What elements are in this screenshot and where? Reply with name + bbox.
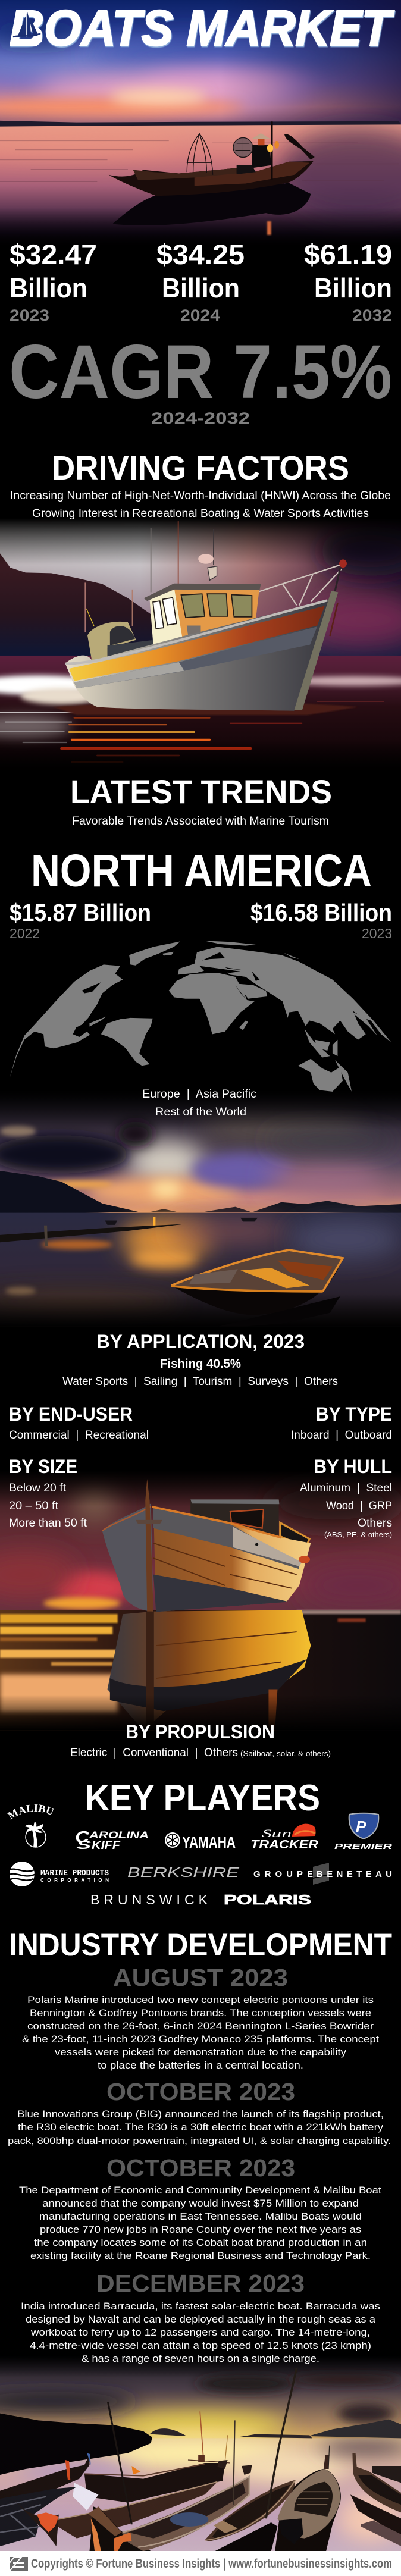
segment: by type: BY TYPE bbox=[316, 1403, 392, 1425]
icon: sailboat logo in B bbox=[11, 11, 42, 46]
development: December 2023: designed by Navalt and can be deployed actually in the rough seas as a bbox=[26, 2314, 376, 2325]
logo: Carolina Skiff: C bbox=[75, 1828, 90, 1846]
market value 2032: 2032 bbox=[352, 306, 392, 324]
development: December 2023: India introduced Barracuda, its fastest solar-electric boat. Barracuda was bbox=[21, 2301, 380, 2312]
development: October 2023 Blue Innovations: OCTOBER 2023 bbox=[106, 2078, 295, 2105]
development: October 2023 Blue Innovations: pack, 800bhp dual-motor powertrain, integrated UI, & solar charging capability. bbox=[8, 2135, 391, 2146]
market value 2024: 2024 bbox=[180, 306, 220, 324]
development: October 2023 Blue Innovations: Blue Innovations Group (BIG) announced the launch of its flagship product, bbox=[17, 2108, 384, 2120]
development: October 2023 Blue Innovations bbox=[8, 2078, 391, 2146]
development: August 2023: Polaris Marine introduced two new concept electric pontoons under its bbox=[27, 1994, 374, 2005]
heading: latest trends: Favorable Trends Associated with Marine Tourism bbox=[72, 815, 329, 828]
development: August 2023: vessels were picked for demonstration due to the capability bbox=[55, 2047, 347, 2058]
market value 2024 bbox=[156, 239, 245, 324]
market value 2023: 2023 bbox=[10, 306, 49, 324]
market value 2032: $61.19 bbox=[304, 239, 392, 270]
footer bbox=[0, 2551, 401, 2576]
heading: driving factors: Growing Interest in Recreational Boating & Water Sports Activities bbox=[32, 507, 369, 520]
logo: Marine Products: MARINE PRODUCTS bbox=[40, 1869, 109, 1878]
segment: by propulsion: Electric | Conventional | Others bbox=[70, 1747, 238, 1759]
segment: by hull: BY HULL bbox=[314, 1456, 392, 1477]
segment: by hull: Others bbox=[358, 1517, 392, 1530]
development: August 2023: & the 23-foot, 11-inch 2023 Godfrey Monaco 235 platforms. The concept bbox=[22, 2033, 379, 2045]
logo: Premier bbox=[334, 1813, 393, 1851]
north america value 2022 bbox=[10, 899, 151, 941]
segment: by propulsion: BY PROPULSION bbox=[126, 1721, 275, 1743]
segment: by type: Inboard | Outboard bbox=[291, 1429, 392, 1441]
panel: lake sunset photo bbox=[0, 1092, 401, 1329]
segment: by hull: (ABS, PE, & others) bbox=[324, 1530, 392, 1539]
CAGR callout: 2024-2032 bbox=[151, 409, 250, 427]
logo: Sun Tracker bbox=[250, 1824, 319, 1851]
regions list: Rest of the World bbox=[155, 1106, 246, 1118]
north america value 2022: 2022 bbox=[10, 926, 40, 941]
development: December 2023: workboat to ferry up to 12 passengers and cargo. The 14-metre-long, bbox=[30, 2327, 370, 2338]
segment: by end-user: BY END-USER bbox=[9, 1403, 133, 1425]
development: October 2023 Malibu: existing facility at the Roane Regional Business and Technology Park. bbox=[30, 2250, 371, 2261]
regions list: Europe | Asia Pacific bbox=[142, 1088, 256, 1101]
rowing boat bbox=[171, 1249, 344, 1315]
segment: by hull bbox=[300, 1456, 392, 1539]
segment: by end-user bbox=[9, 1403, 149, 1441]
development: August 2023: to place the batteries in a central location. bbox=[98, 2060, 303, 2071]
distant shoreline bbox=[0, 121, 401, 127]
logo: Polaris: POLARIS bbox=[224, 1892, 311, 1907]
heading: driving factors: DRIVING FACTORS bbox=[52, 449, 349, 487]
development: October 2023 Malibu: manufacturing operations in East Tennessee. Malibu Boats would bbox=[39, 2211, 362, 2222]
logo: Berkshire: BERKSHIRE bbox=[127, 1864, 240, 1880]
heading: driving factors: Increasing Number of High-Net-Worth-Individual (HNWI) Across the Globe bbox=[10, 490, 391, 502]
logo: Carolina Skiff: S bbox=[76, 1839, 92, 1852]
segment: by end-user: Commercial | Recreational bbox=[9, 1429, 149, 1441]
logo: Premier: PREMIER bbox=[334, 1842, 393, 1851]
market value 2032 bbox=[304, 239, 392, 324]
segment: by size: 20 – 50 ft bbox=[9, 1500, 59, 1512]
market value 2032: Billion bbox=[314, 272, 392, 303]
market value 2023 bbox=[10, 239, 97, 324]
logo: Carolina Skiff bbox=[75, 1828, 149, 1852]
heading: latest trends bbox=[70, 773, 332, 828]
development: August 2023: constructed on the 26-foot, 6-inch 2024 Bennington L-Series Bowrider bbox=[27, 2020, 374, 2032]
title: BOATS MARKET bbox=[10, 0, 394, 56]
boat reflection bbox=[112, 183, 311, 225]
logo: Carolina Skiff: KIFF bbox=[92, 1839, 121, 1852]
logo: Sun Tracker: Sun bbox=[262, 1828, 292, 1840]
world map globe bbox=[10, 941, 391, 1092]
heading: by application bbox=[62, 1331, 338, 1388]
logo: Yamaha: YAMAHA bbox=[182, 1833, 236, 1851]
regions list bbox=[142, 1088, 256, 1118]
boat reflection bbox=[108, 1610, 311, 1732]
boats group bbox=[0, 2368, 401, 2551]
segment: by propulsion: (Sailboat, solar, & others) bbox=[240, 1749, 331, 1758]
icon: Fortune Business Insights logo bbox=[10, 2557, 28, 2571]
development: October 2023 Malibu: the company locates some of its Cobalt boat brand production in an bbox=[34, 2237, 367, 2248]
market value 2024: $34.25 bbox=[156, 239, 245, 270]
development: December 2023: & has a range of seven hours on a single charge. bbox=[82, 2353, 319, 2364]
market value 2024: Billion bbox=[162, 272, 240, 303]
segment: by size: Below 20 ft bbox=[9, 1482, 67, 1494]
development: August 2023: Bennington & Godfrey Pontoons brands. The conception vessels were bbox=[30, 2007, 371, 2019]
logo: Groupe Beneteau bbox=[253, 1863, 392, 1885]
development: October 2023 Malibu: OCTOBER 2023 bbox=[106, 2154, 295, 2182]
segment: by hull: Aluminum | Steel bbox=[300, 1482, 392, 1494]
north america value 2023 bbox=[250, 899, 392, 941]
panel: hero fisherman photo bbox=[0, 0, 401, 246]
development: October 2023 Malibu: announced that the company would invest $75 Million to expand bbox=[42, 2198, 359, 2209]
development: October 2023 Malibu: The Department of Economic and Community Development & Malibu Boat bbox=[19, 2185, 381, 2196]
north america value 2022: $15.87 Billion bbox=[10, 899, 151, 926]
segment: by propulsion bbox=[70, 1721, 331, 1759]
lantern reflection bbox=[267, 221, 271, 235]
logo: Groupe Beneteau: GROUPE bbox=[253, 1869, 313, 1879]
north america value 2023: 2023 bbox=[362, 926, 392, 941]
wooden boat bbox=[102, 1479, 311, 1612]
fishing boat bbox=[109, 121, 315, 196]
development: August 2023 bbox=[22, 1964, 379, 2071]
logo: Marine Products: CORPORATION bbox=[40, 1878, 109, 1883]
segment: by hull: Wood | GRP bbox=[326, 1500, 392, 1512]
segment: by size bbox=[9, 1456, 87, 1530]
development: October 2023 Blue Innovations: the R30 electric boat. The R30 is a 30ft electric boat with a 221kWh battery bbox=[18, 2121, 384, 2133]
market value 2023: $32.47 bbox=[10, 239, 97, 270]
logo: Premier: P bbox=[356, 1817, 366, 1835]
logo: Sun Tracker: TRACKER bbox=[250, 1838, 319, 1851]
development: December 2023: 4.4-metre-wide vessel can attain a top speed of 12.5 knots (23 kmph) bbox=[30, 2340, 371, 2351]
logo: Carolina Skiff: AROLINA bbox=[89, 1829, 149, 1841]
heading: driving factors bbox=[10, 449, 391, 520]
logo: Brunswick: BRUNSWICK bbox=[90, 1892, 208, 1907]
logo: Marine Products bbox=[8, 1862, 109, 1886]
segment: by size: More than 50 ft bbox=[9, 1517, 87, 1530]
logo: Malibu bbox=[7, 1804, 55, 1848]
heading: key players: KEY PLAYERS bbox=[85, 1778, 320, 1819]
segment: by size: BY SIZE bbox=[9, 1456, 77, 1477]
market value 2023: Billion bbox=[10, 272, 87, 303]
segment: by type bbox=[291, 1403, 392, 1441]
heading: by application: Water Sports | Sailing | Tourism | Surveys | Others bbox=[62, 1375, 338, 1388]
panel: fishing trawler photo bbox=[0, 519, 401, 771]
heading: by application: BY APPLICATION, 2023 bbox=[96, 1331, 305, 1352]
development: October 2023 Malibu: produce 770 new jobs in Roane County over the next five years as bbox=[40, 2224, 361, 2235]
development: August 2023: AUGUST 2023 bbox=[113, 1964, 288, 1991]
trawler boat bbox=[65, 521, 347, 711]
logo: Malibu: MALIBU bbox=[7, 1804, 55, 1819]
heading: latest trends: LATEST TRENDS bbox=[70, 773, 332, 810]
development: December 2023 bbox=[21, 2270, 380, 2364]
development: December 2023: DECEMBER 2023 bbox=[96, 2270, 305, 2297]
heading: by application: Fishing 40.5% bbox=[160, 1357, 241, 1371]
panel: longtail boats photo bbox=[0, 2356, 401, 2551]
logo: Groupe Beneteau: BENETEAU bbox=[317, 1869, 392, 1879]
development: October 2023 Malibu bbox=[19, 2154, 381, 2261]
panel: wooden boat photo bbox=[0, 1471, 401, 1732]
logo: Yamaha bbox=[165, 1832, 236, 1851]
